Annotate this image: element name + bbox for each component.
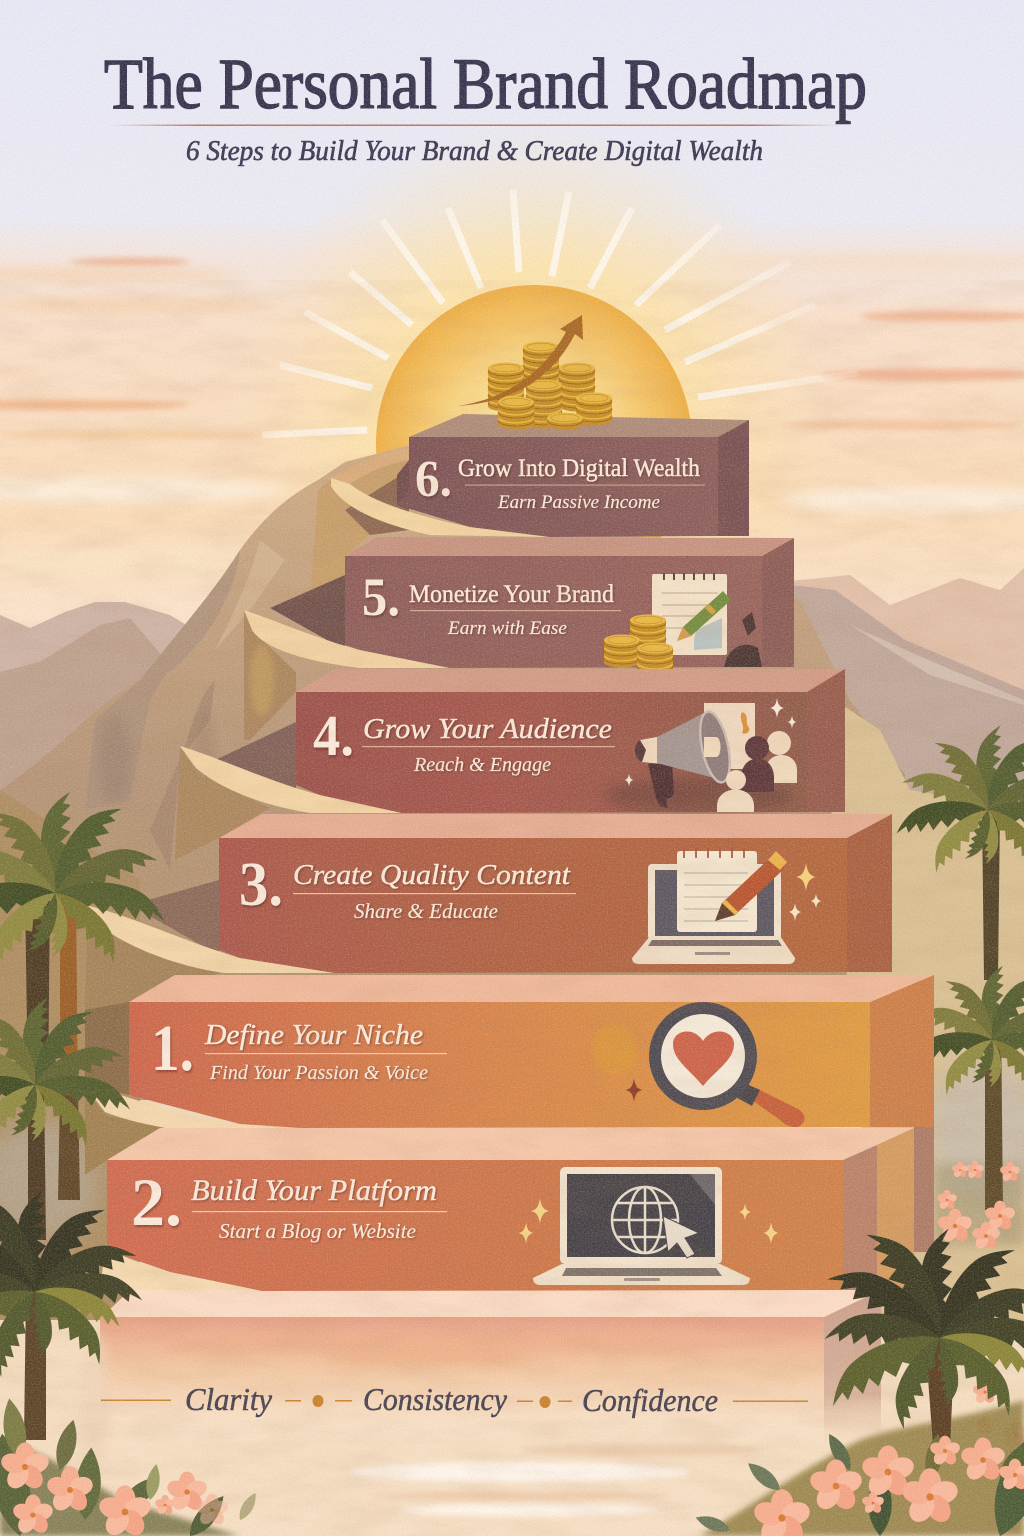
step 5 title: Monetize Your Brand bbox=[409, 581, 614, 608]
ink blot bbox=[724, 612, 762, 667]
step 2 side face bbox=[843, 1145, 877, 1290]
number 2: 2. bbox=[131, 1164, 182, 1240]
title: The Personal Brand Roadmap bbox=[104, 44, 867, 124]
step 2 text bbox=[131, 1164, 447, 1243]
bush: bottom right backing bbox=[700, 1400, 1024, 1536]
base front face bbox=[100, 1317, 824, 1450]
step 2 rule bbox=[192, 1211, 447, 1212]
step 6 top face bbox=[409, 414, 749, 437]
step 3 front face bbox=[219, 838, 847, 973]
step 4 top face bbox=[296, 669, 845, 692]
confidence: Confidence bbox=[582, 1382, 718, 1418]
number 1: 1. bbox=[151, 1012, 194, 1085]
step 6 left bulge bbox=[397, 460, 409, 510]
distant mountains bbox=[0, 568, 1024, 830]
step 6 front face bbox=[397, 437, 718, 537]
audience bbox=[767, 731, 791, 755]
coin stacks bbox=[630, 638, 666, 656]
growth arrow bbox=[458, 315, 583, 406]
base side face bbox=[824, 1289, 881, 1440]
cream mouthpiece bbox=[637, 736, 662, 764]
water streaks bbox=[81, 1330, 760, 1516]
step 5 bbox=[345, 537, 794, 668]
sparkles bbox=[770, 698, 784, 718]
step 6 rule bbox=[465, 484, 705, 486]
consistency: Consistency bbox=[363, 1381, 508, 1417]
right line bbox=[733, 1400, 808, 1402]
step 3 bbox=[219, 814, 892, 973]
step 5 rule bbox=[410, 610, 621, 611]
step 5 subtitle: Earn with Ease bbox=[447, 618, 567, 639]
notepad bbox=[677, 851, 757, 932]
separator 2 bbox=[517, 1396, 572, 1408]
flowers: right mid cluster bbox=[936, 1161, 1024, 1450]
step 4 rule bbox=[362, 746, 615, 747]
icon: laptop, notepad and pencil bbox=[632, 848, 821, 964]
step 5 top face bbox=[345, 537, 794, 556]
icon: megaphone and audience bbox=[605, 698, 797, 813]
step 3 top face bbox=[219, 814, 892, 838]
step 6 side face bbox=[718, 420, 749, 536]
laptop base bbox=[632, 936, 795, 964]
step 2 front face bbox=[107, 1160, 843, 1291]
separator 1 bbox=[285, 1395, 352, 1407]
icon: coins and growth arrow bbox=[458, 315, 612, 430]
poster bbox=[704, 703, 755, 769]
step 5 side face bbox=[762, 538, 794, 667]
step 2 subtitle: Start a Blog or Website bbox=[219, 1219, 416, 1243]
handle bbox=[648, 760, 674, 808]
step 1 rule bbox=[205, 1053, 447, 1054]
step 1 extended side column bbox=[914, 1127, 934, 1252]
central mountain bbox=[0, 445, 905, 1100]
sparkles bbox=[531, 1198, 549, 1224]
laptop lid bbox=[648, 864, 781, 940]
road wall facets bbox=[310, 449, 409, 600]
subtitle: 6 Steps to Build Your Brand & Create Digital Wealth bbox=[186, 136, 763, 167]
heart bbox=[673, 1031, 734, 1086]
mountain ridges bbox=[85, 540, 285, 870]
step 6 text bbox=[415, 451, 705, 513]
icon: magnifying glass with heart bbox=[593, 1002, 805, 1127]
left line bbox=[101, 1400, 171, 1401]
sparkles bbox=[796, 863, 816, 891]
palm tree: right front bbox=[818, 1218, 1024, 1445]
stain bbox=[593, 1024, 637, 1076]
step 4 subtitle: Reach & Engage bbox=[413, 754, 551, 776]
sun rays bbox=[262, 190, 858, 435]
step 1 text bbox=[151, 1012, 447, 1085]
lens bbox=[649, 1002, 757, 1110]
step 3 text bbox=[239, 851, 576, 923]
notepad bbox=[652, 574, 727, 655]
sun bbox=[376, 285, 692, 601]
step 1 side face bbox=[870, 975, 934, 1127]
title rule bbox=[110, 124, 840, 126]
step 1 bbox=[129, 975, 934, 1128]
clouds bbox=[0, 255, 1024, 572]
step 1 front face bbox=[129, 1002, 870, 1128]
step 4 side face bbox=[807, 669, 845, 812]
step 2 title: Build Your Platform bbox=[191, 1174, 437, 1207]
sparkle bbox=[626, 1078, 642, 1102]
pencil bbox=[715, 856, 785, 921]
palm trees: left back bbox=[0, 792, 167, 1240]
step 4 front face bbox=[296, 692, 807, 813]
step 6 subtitle: Earn Passive Income bbox=[497, 492, 660, 513]
step 5 front face bbox=[345, 556, 762, 668]
cursor bbox=[663, 1216, 699, 1258]
step 3 rule bbox=[293, 893, 576, 894]
globe bbox=[612, 1187, 678, 1253]
cone bbox=[657, 712, 722, 780]
icon: notepad, pencil and coins bbox=[604, 573, 762, 676]
step 3 title: Create Quality Content bbox=[293, 859, 571, 891]
step 1 top face bbox=[129, 975, 934, 1002]
lower terrain bbox=[0, 690, 1024, 1330]
icon: laptop with globe and cursor bbox=[519, 1167, 779, 1285]
base top face bbox=[102, 1290, 881, 1317]
step 2 bbox=[107, 1128, 914, 1291]
speckled shadow bbox=[605, 777, 795, 813]
pencil bbox=[677, 591, 731, 641]
flowers and foliage: bottom right bbox=[694, 1422, 1024, 1536]
sun glow bbox=[234, 120, 834, 720]
number 3: 3. bbox=[239, 851, 283, 919]
winding road bbox=[82, 448, 550, 1291]
step 2 top face bbox=[107, 1128, 914, 1160]
step 4 bbox=[296, 669, 845, 813]
handle bbox=[745, 1088, 805, 1127]
laptop base bbox=[533, 1264, 750, 1285]
step 2 side golden band bbox=[877, 1128, 914, 1290]
clarity: Clarity bbox=[185, 1381, 273, 1417]
step 4 text bbox=[313, 703, 615, 776]
step 4 title: Grow Your Audience bbox=[363, 713, 612, 745]
step 3 subtitle: Share & Educate bbox=[354, 899, 498, 923]
road bands bbox=[331, 448, 409, 488]
base step bbox=[100, 1289, 881, 1450]
step 6 title: Grow Into Digital Wealth bbox=[458, 455, 700, 482]
palm trees: right back bbox=[894, 725, 1024, 1210]
step 3 side face bbox=[847, 814, 892, 972]
step 6 bbox=[397, 414, 749, 537]
number 6: 6. bbox=[415, 451, 452, 508]
number 4: 4. bbox=[313, 703, 354, 768]
palm tree: left front bbox=[0, 1180, 142, 1440]
step 1 subtitle: Find Your Passion & Voice bbox=[209, 1062, 428, 1084]
laptop lid bbox=[560, 1167, 722, 1264]
number 5: 5. bbox=[362, 567, 400, 627]
flowers and foliage: bottom left bbox=[0, 1397, 260, 1536]
step 1 title: Define Your Niche bbox=[204, 1019, 423, 1051]
footer values strip bbox=[101, 1381, 808, 1418]
step 5 text bbox=[362, 567, 621, 639]
